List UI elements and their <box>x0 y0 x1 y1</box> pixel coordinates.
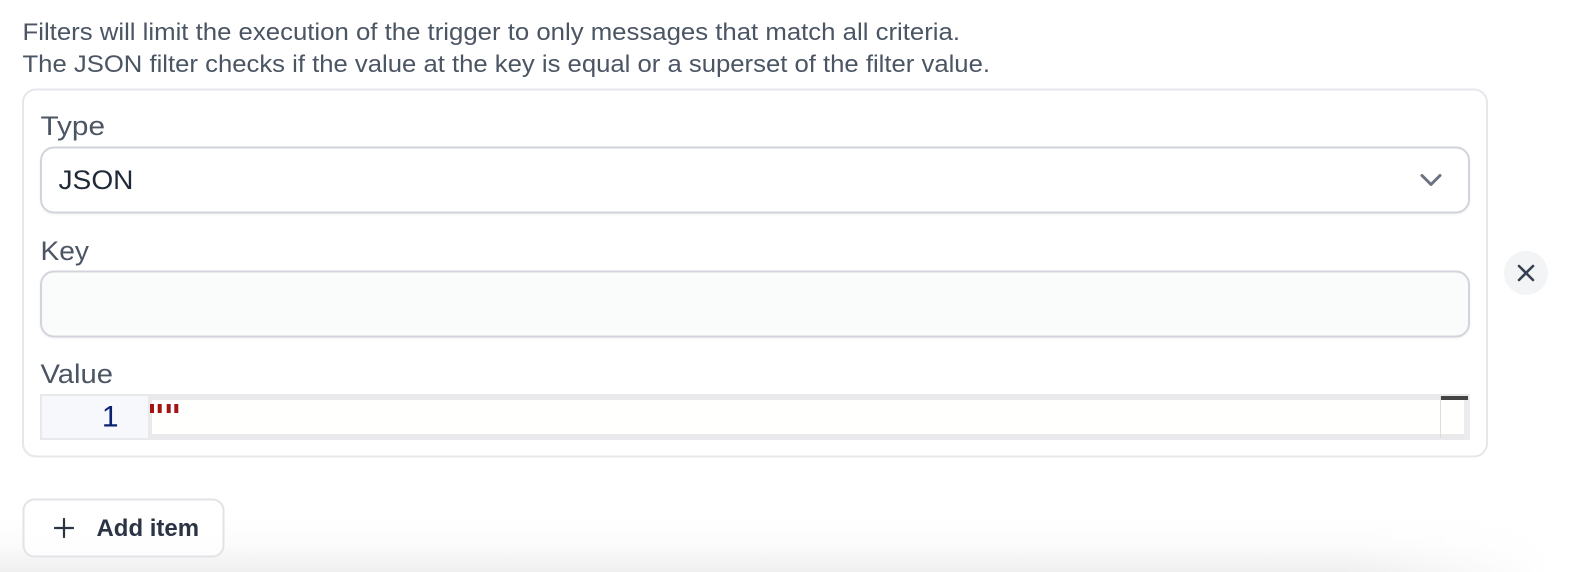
select: Type JSON: JSON <box>58 165 134 195</box>
label: Value: Value <box>40 359 113 389</box>
remove button <box>1504 251 1548 295</box>
code editor: Value <box>40 394 1470 440</box>
description text <box>22 19 990 78</box>
icon: plus <box>55 519 73 537</box>
button label: Add item <box>96 515 199 542</box>
icon: close <box>1519 266 1533 280</box>
label: Type: Type <box>40 111 105 141</box>
description text: The JSON filter checks if the value at the key is equal or a superset of the filter value. <box>22 51 990 78</box>
description text: Filters will limit the execution of the trigger to only messages that match all criteria. <box>22 19 960 46</box>
add item button <box>24 500 224 556</box>
label: Key: Key <box>40 236 90 266</box>
bottom shadow gradient <box>0 518 1578 572</box>
panel: filter item <box>23 90 1487 456</box>
icon: chevron down <box>1422 176 1440 184</box>
line number: 1 <box>102 400 118 434</box>
input: Key <box>41 272 1469 336</box>
empty string value <box>150 404 178 413</box>
select: Type JSON <box>41 148 1469 212</box>
